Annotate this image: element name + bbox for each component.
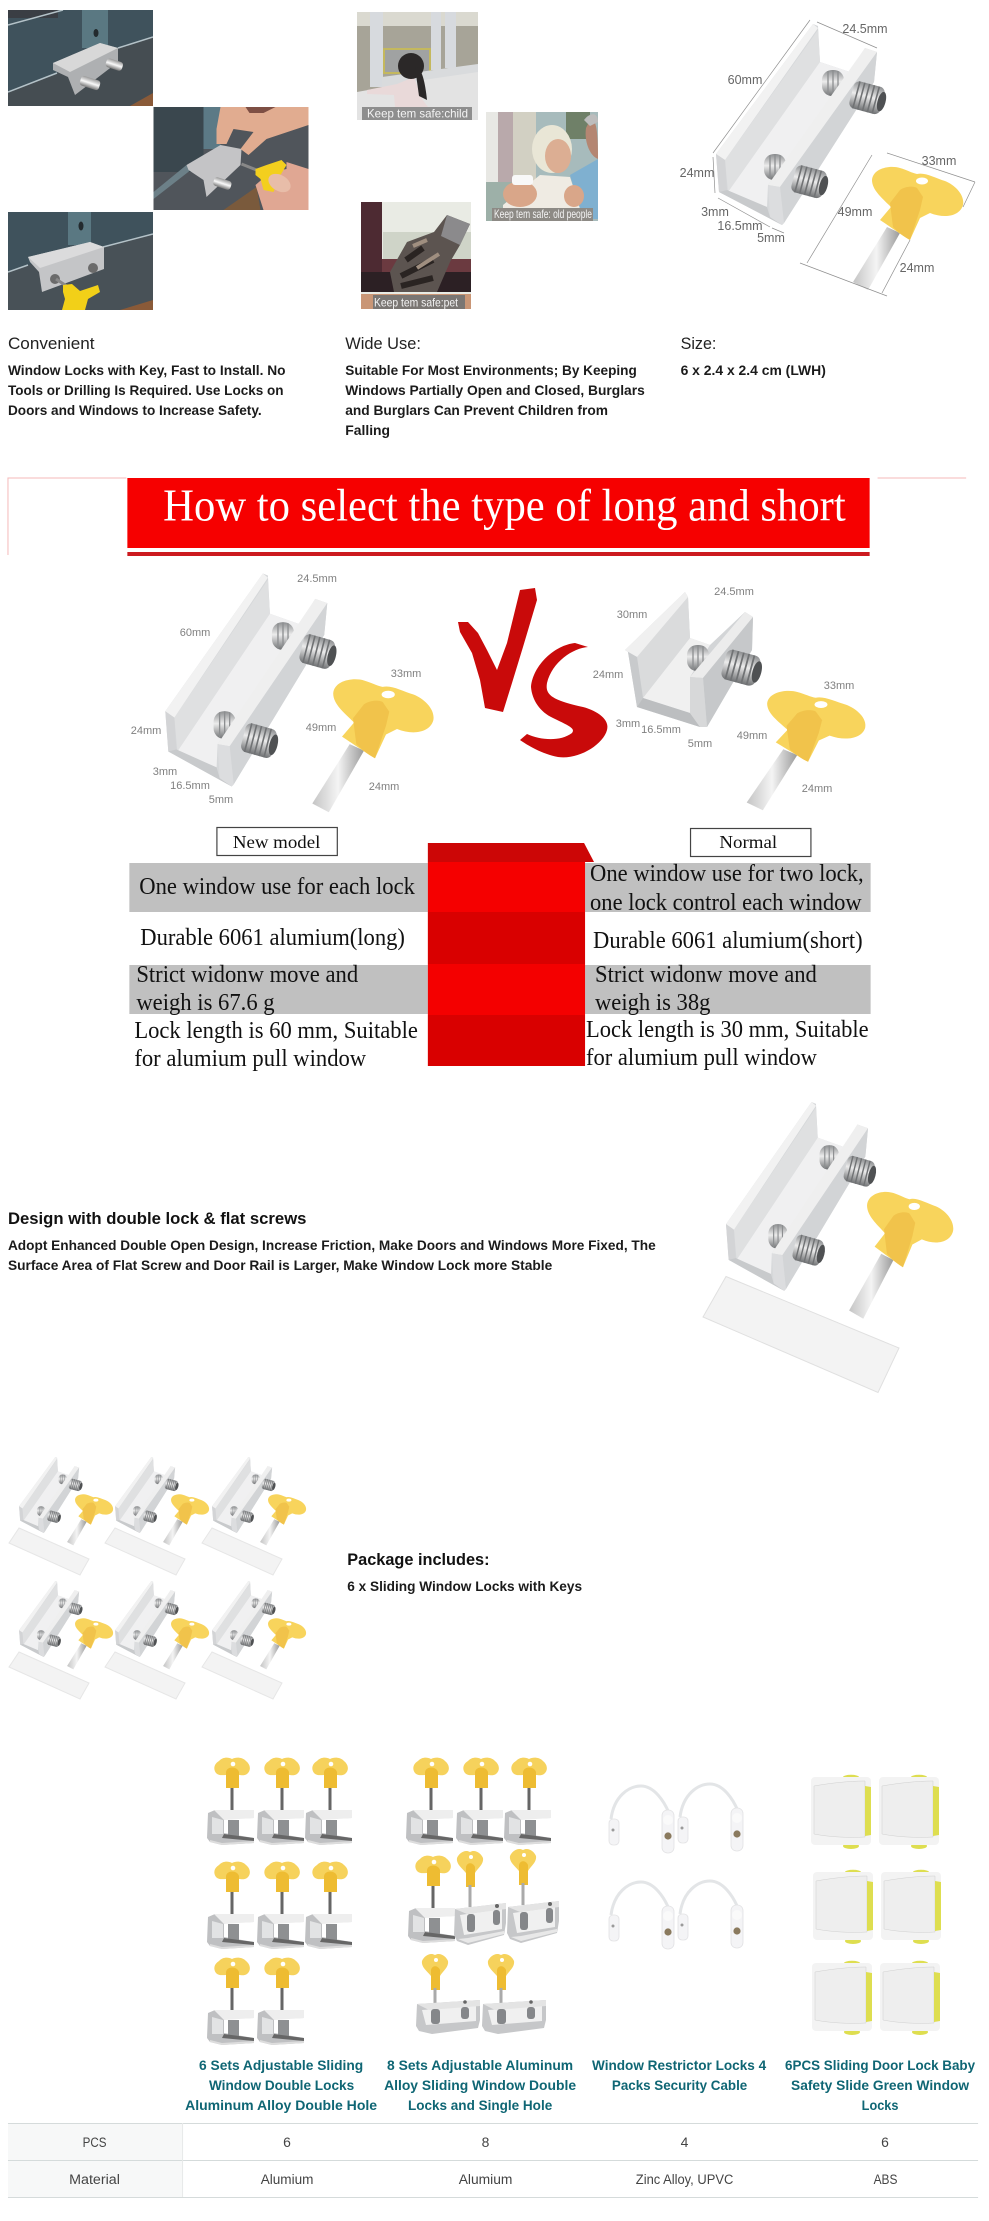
left column text: Strict widonw move and [136,962,358,988]
row: PCS: 8 [482,2134,490,2150]
row: PCS: 6 [881,2134,889,2150]
label: normal: Normal [719,832,777,852]
row: material [69,2171,897,2187]
dimension labels: 16.5mm [717,219,763,233]
caption: pet: Keep tem safe:pet [374,296,459,310]
text block: wide use: Falling [345,423,390,438]
text block: wide use: Suitable For Most Environments; By Keeping [345,363,637,378]
product image: sliding door locks [811,1775,941,2035]
text block: package includes: Package includes: [347,1550,490,1569]
photo: elderly couple [486,112,598,221]
text block: package includes: 6 x Sliding Window Locks with Keys [347,1579,582,1594]
dimension labels: long lock: 49mm [306,722,336,734]
right column text: One window use for two lock, [590,861,864,887]
product image: six lock kits [9,1457,306,1699]
dimension labels: short lock: 33mm [824,680,854,692]
right column text [586,861,869,1071]
dimension labels: long lock: 60mm [180,627,210,639]
text block: convenient [8,334,286,418]
product titles: Alloy Sliding Window Double [384,2078,577,2093]
title banner: long vs short: How to select the type of long and short [163,479,846,531]
dimension labels: long lock: 16.5mm [170,780,210,792]
row: material: ABS [874,2171,897,2187]
dimension labels [680,22,956,275]
text block: size: Size: [681,334,716,353]
right column text: Durable 6061 alumium(short) [593,928,863,954]
dimension labels: long lock: 24mm [131,725,161,737]
dimension labels: short lock: 3mm [616,718,640,730]
diagram: size of lock and key [680,20,975,296]
dimension labels: long lock: 3mm [153,766,177,778]
specification table [8,2123,978,2198]
dimension labels: 33mm [922,154,956,168]
text block: wide use: Wide Use: [345,334,421,353]
photo: cat at window [361,202,471,310]
dimension labels: short lock: 49mm [737,730,767,742]
text block: wide use: and Burglars Can Prevent Children from [345,403,608,418]
dimension labels: 3mm [701,205,729,219]
product titles [185,2058,976,2113]
left column text: for alumium pull window [134,1046,367,1072]
left column text [134,874,418,1072]
row: material: Material [69,2171,120,2187]
row: PCS: 4 [681,2134,689,2150]
panel: wide use photos [357,12,598,310]
dimension labels: short lock: 24.5mm [714,586,754,598]
row: material: Alumium [261,2171,313,2187]
photo: lock on window rail [8,10,153,106]
diagram: short lock model [593,586,865,810]
text block: double lock design [8,1209,656,1273]
right column text: one lock control each window [590,890,862,916]
text block: size [681,334,826,378]
product image: 8 set mixed locks [406,1758,559,2034]
row: PCS: PCS [83,2134,106,2150]
left column text: One window use for each lock [139,874,415,900]
text block: convenient: Window Locks with Key, Fast to Install. No [8,363,286,378]
photo: lock fitted with yellow key [8,212,153,310]
red centre column [428,843,594,1066]
left column text: weigh is 67.6 g [136,990,275,1016]
dimension labels: 60mm [728,73,762,87]
text block: convenient: Tools or Drilling Is Required. Use Locks on [8,383,284,398]
left column text: Lock length is 60 mm, Suitable [134,1018,418,1044]
left column text: Durable 6061 alumium(long) [140,925,405,951]
text block: size: 6 x 2.4 x 2.4 cm (LWH) [681,363,826,378]
product titles: Packs Security Cable [612,2078,748,2093]
product image: 6 set double locks [207,1758,352,2045]
dimension labels: 24mm [680,166,714,180]
right column text: Strict widonw move and [595,962,817,988]
photo: turning the key by hand [154,107,308,210]
title banner: long vs short [127,478,870,556]
label: new model: New model [233,832,320,852]
row: PCS [83,2134,889,2150]
dimension labels: short lock: 5mm [688,738,712,750]
product titles: Locks [862,2098,898,2113]
dimension labels: short lock: 24mm [593,669,623,681]
product titles: Window Double Locks [209,2078,354,2093]
product titles: 6 Sets Adjustable Sliding [199,2058,363,2073]
dimension labels: 24mm [900,261,934,275]
text block: convenient: Doors and Windows to Increase Safety. [8,403,262,418]
right column text: Lock length is 30 mm, Suitable [586,1017,869,1043]
text block: wide use: Windows Partially Open and Closed, Burglars [345,383,645,398]
row: PCS: 6 [283,2134,291,2150]
product titles: Window Restrictor Locks 4 [592,2058,767,2073]
dimension labels: long lock: 24.5mm [297,573,337,585]
text block: package includes [347,1550,582,1594]
dimension labels: long lock: 33mm [391,668,421,680]
product titles: Locks and Single Hole [408,2098,553,2113]
panel: comparison table [129,843,871,1072]
dimension labels: long lock: 24mm [369,781,399,793]
text block: double lock design: Surface Area of Flat Screw and Door Rail is Larger, Make Window Lock more Stable [8,1258,553,1273]
product titles: Aluminum Alloy Double Hole [185,2098,378,2113]
dimension labels: long lock: 5mm [209,794,233,806]
product titles: 6PCS Sliding Door Lock Baby [785,2058,976,2073]
product titles: Safety Slide Green Window [791,2078,970,2093]
product image: window restrictor cables [609,1784,743,1949]
text block: double lock design: Design with double lock & flat screws [8,1209,306,1228]
product image: lock, key and plate [703,1102,953,1392]
text block: wide use [345,334,645,438]
row: material: Zinc Alloy, UPVC [636,2171,733,2187]
product titles: 8 Sets Adjustable Aluminum [387,2058,573,2073]
text block: convenient: Convenient [8,334,95,353]
label: normal [691,828,811,856]
panel: installation photos [8,10,308,310]
dimension labels: 24.5mm [842,22,888,36]
right column text: for alumium pull window [586,1045,818,1071]
text block: double lock design: Adopt Enhanced Double Open Design, Increase Friction, Make Doors and Windows More Fixed, The [8,1238,656,1253]
dimension labels: long lock [131,573,421,806]
dimension labels: short lock: 24mm [802,783,832,795]
diagram: long lock model [131,573,434,812]
label: new model [217,828,337,856]
graphic: VS [458,588,607,757]
caption: child: Keep tem safe:child [367,106,468,120]
photo: child at window [357,12,478,120]
dimension labels: short lock: 30mm [617,609,647,621]
dimension labels: short lock: 16.5mm [641,724,681,736]
row: material: Alumium [459,2171,512,2187]
dimension labels: 49mm [838,205,872,219]
dimension labels: 5mm [757,231,785,245]
right column text: weigh is 38g [595,990,710,1016]
dimension labels: short lock [593,586,854,795]
